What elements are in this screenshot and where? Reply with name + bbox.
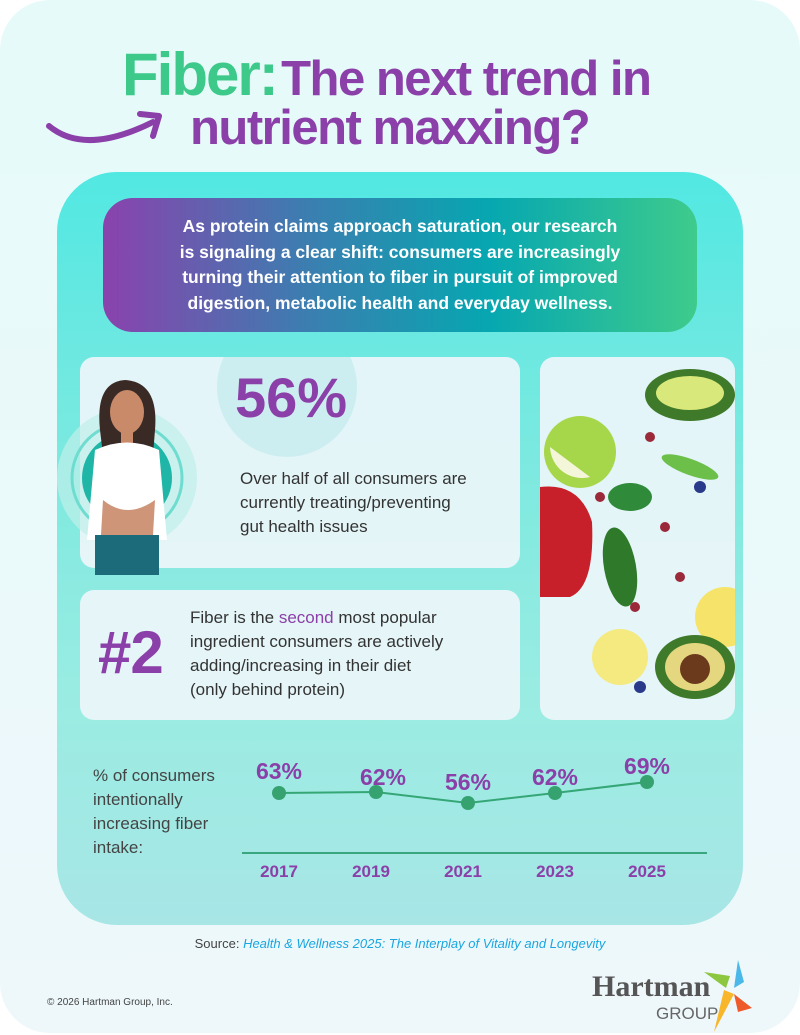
big #2: #2 <box>98 619 163 686</box>
line chart: 62% <box>360 764 406 790</box>
chart label: % of consumers <box>93 766 215 785</box>
big stat 56%: 56% <box>235 366 347 429</box>
source: Source: Health & Wellness 2025: The Interplay of Vitality and Longevity <box>195 936 605 951</box>
decorative circle <box>217 317 357 457</box>
line chart: 2019 <box>352 862 390 881</box>
line chart: 2023 <box>536 862 574 881</box>
chart label: intentionally <box>93 790 183 809</box>
line chart <box>242 755 707 881</box>
stat text: gut health issues <box>240 517 368 536</box>
line chart: 62% <box>532 764 578 790</box>
illustration: woman holding stomach <box>57 380 197 575</box>
line chart: 2017 <box>260 862 298 881</box>
card: #2 ingredient <box>80 590 520 720</box>
line chart: 2021 <box>444 862 482 881</box>
copyright: © 2026 Hartman Group, Inc. <box>47 997 173 1008</box>
line chart: 56% <box>445 769 491 795</box>
intro gradient box <box>103 198 697 332</box>
chart label: intake: <box>93 838 143 857</box>
title: nutrient maxxing? <box>190 101 589 155</box>
card: food illustration <box>540 357 735 720</box>
ingredient text <box>190 608 444 699</box>
chart label <box>93 766 215 857</box>
ingredient text: (only behind protein) <box>190 680 345 699</box>
stat text <box>240 469 467 536</box>
intro gradient box: turning their attention to fiber in pursuit of improved <box>182 267 618 287</box>
line chart: 63% <box>256 758 302 784</box>
intro gradient box: is signaling a clear shift: consumers are increasingly <box>180 242 620 262</box>
intro gradient box: digestion, metabolic health and everyday wellness. <box>188 292 612 312</box>
stat text: currently treating/preventing <box>240 493 451 512</box>
line chart: 2025 <box>628 862 666 881</box>
card: gut health stat <box>80 357 520 568</box>
ingredient text: ingredient consumers are actively <box>190 632 443 651</box>
logo: Hartman Group: Hartman <box>592 970 710 1003</box>
title <box>122 41 650 155</box>
title: Fiber: The next trend in <box>122 41 650 108</box>
logo: Hartman Group <box>592 960 752 1032</box>
stat text: Over half of all consumers are <box>240 469 467 488</box>
chart label: increasing fiber <box>93 814 208 833</box>
icon: curved arrow <box>46 111 162 144</box>
ingredient text: adding/increasing in their diet <box>190 656 411 675</box>
intro gradient box: As protein claims approach saturation, our research <box>183 216 617 236</box>
main teal panel <box>57 172 743 925</box>
logo: Hartman Group: GROUP <box>656 1004 718 1023</box>
ingredient text: Fiber is the second most popular <box>190 608 437 627</box>
